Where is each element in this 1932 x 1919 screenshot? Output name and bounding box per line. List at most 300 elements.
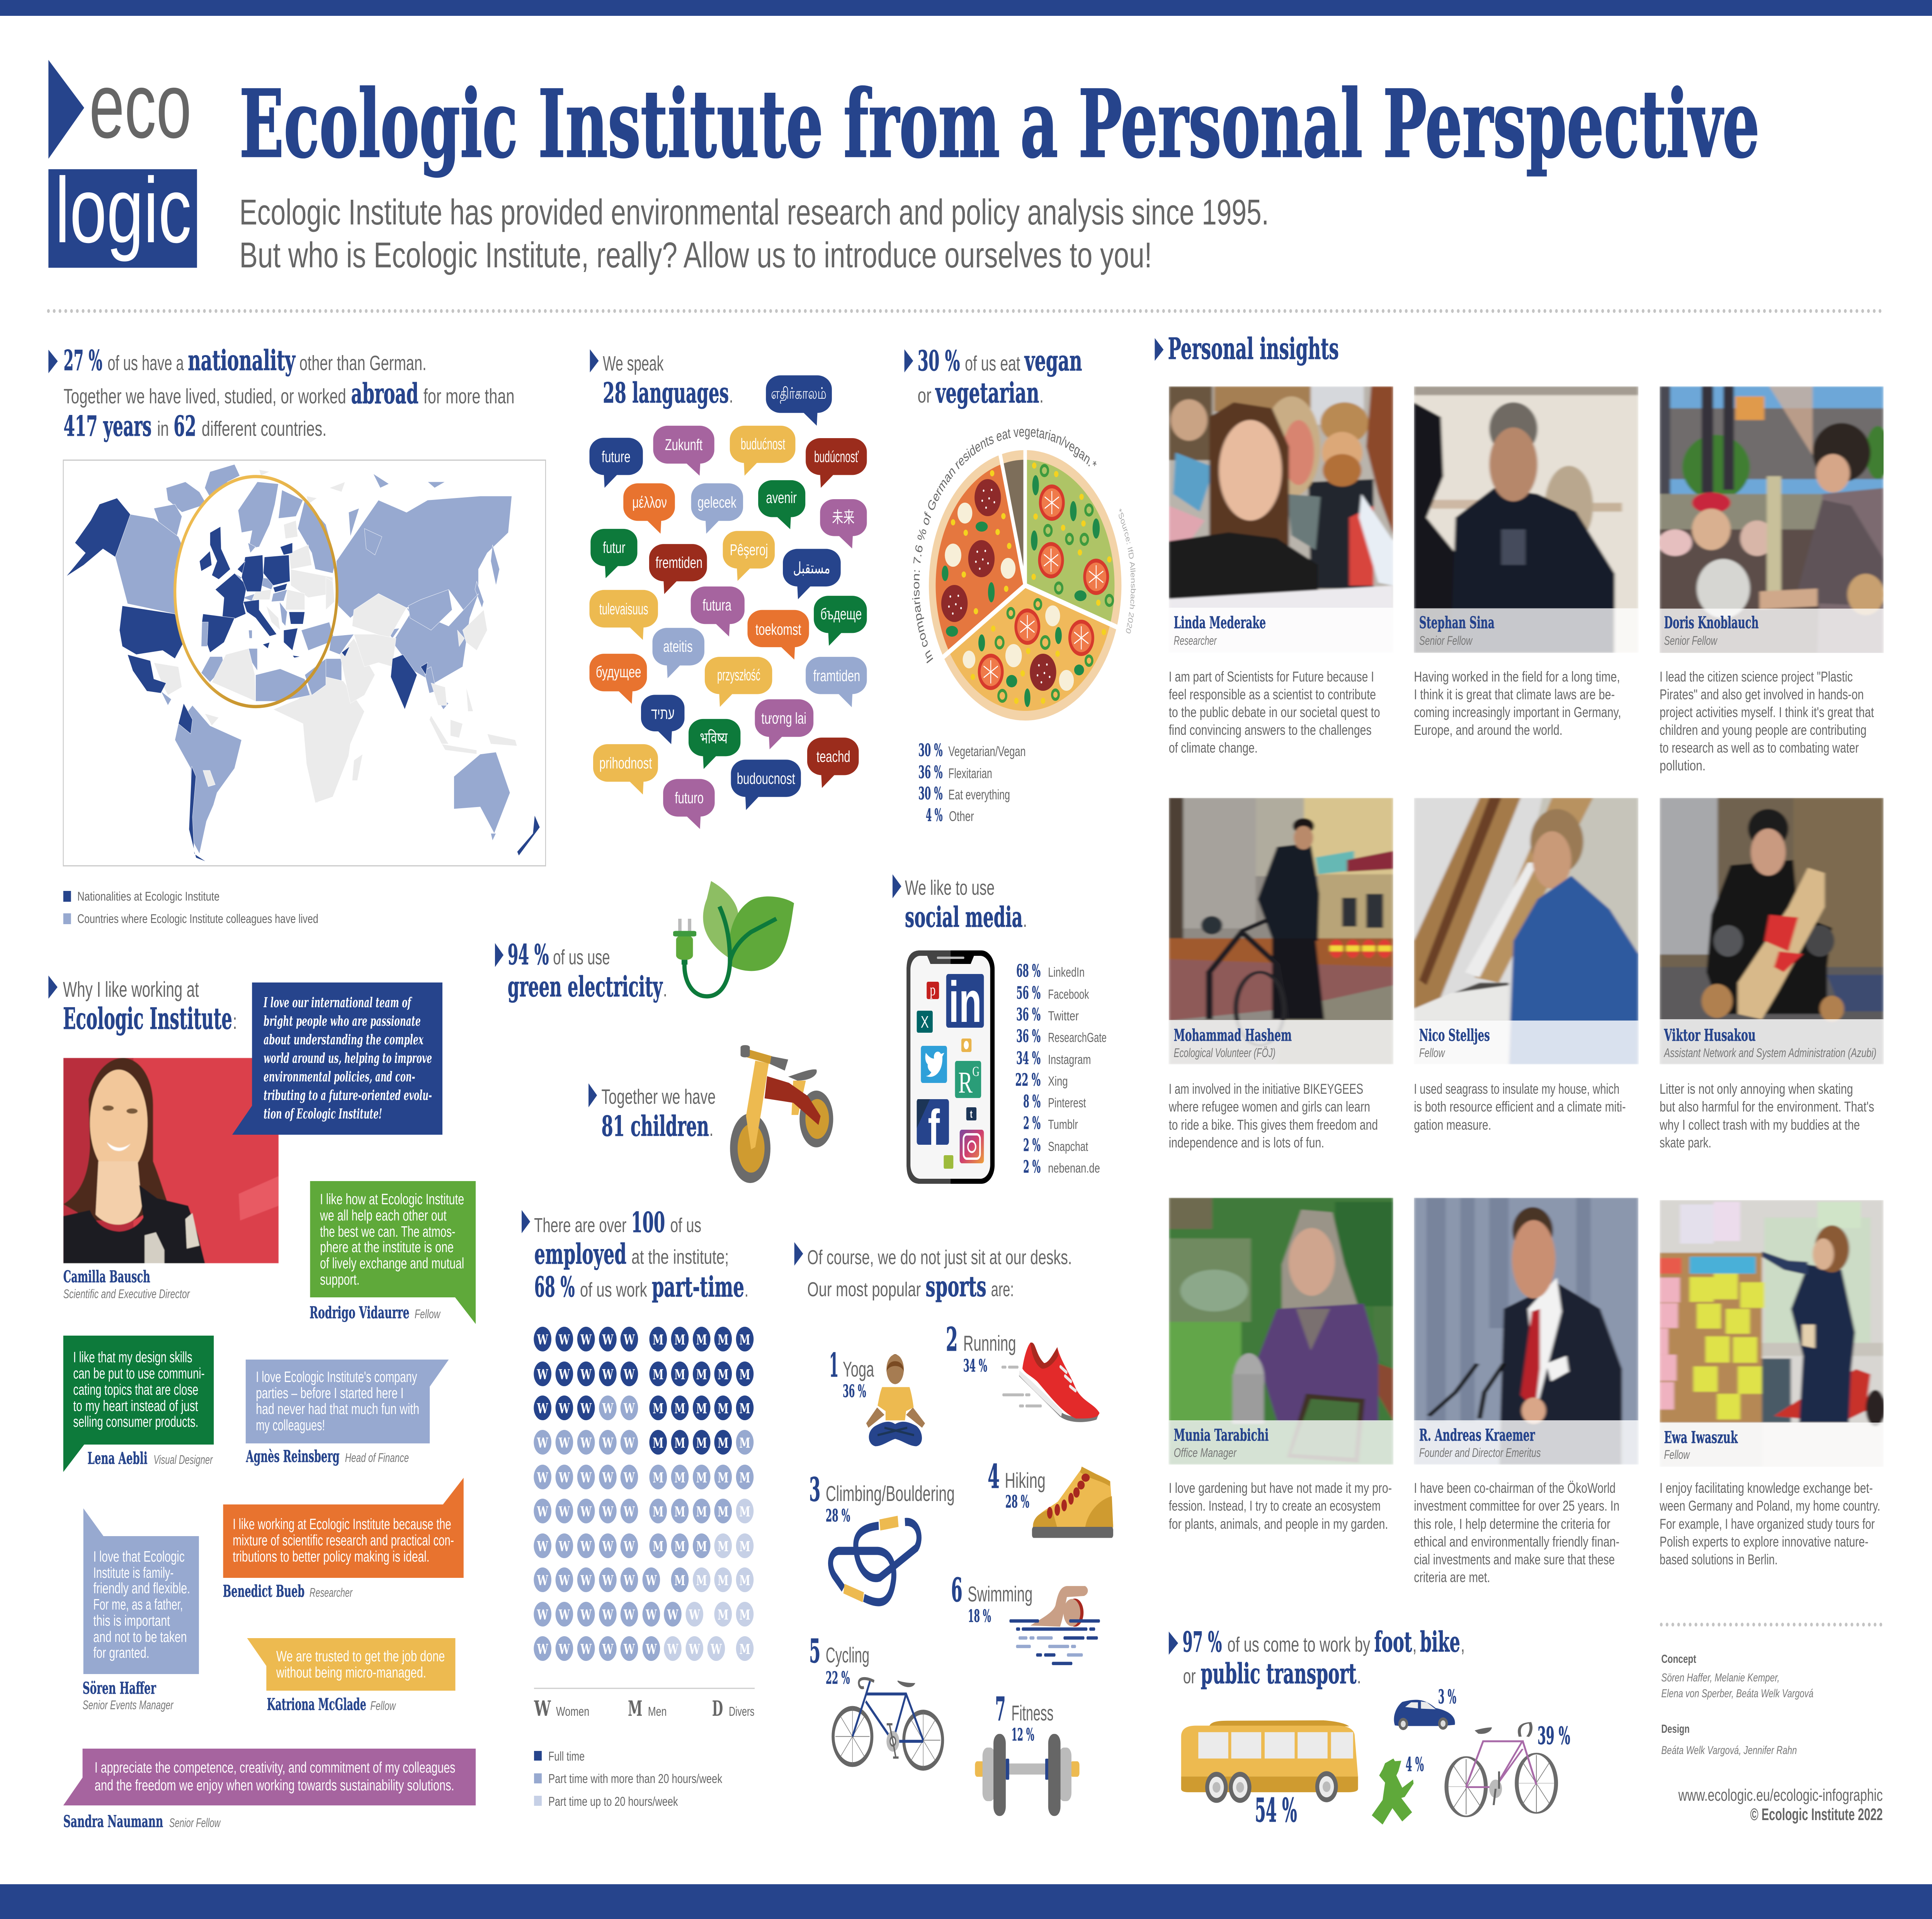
text: Ewa Iwaszuk: I enjoy facilitating knowledge exchange bet-	[1660, 1480, 1873, 1496]
quote: Rodrigo Vidaurre	[310, 1181, 476, 1324]
text: Ewa Iwaszuk: For example, I have organized study tours for	[1660, 1516, 1875, 1532]
icons: commute illustrations: 54 %	[1255, 1792, 1297, 1830]
text: Ewa Iwaszuk	[1659, 1480, 1880, 1567]
icon: smartphone with social apps: in	[949, 969, 982, 1034]
panel: commute heading: foot	[1374, 1625, 1412, 1658]
staff legend: M	[628, 1696, 643, 1721]
panel: commute heading: .	[1357, 1665, 1361, 1688]
caption: Doris Knoblauch: Doris Knoblauch	[1664, 613, 1759, 632]
photo: Linda Mederake	[1169, 386, 1393, 653]
caption: Ewa Iwaszuk	[1664, 1428, 1738, 1462]
social media list	[1015, 961, 1107, 1177]
panel: social media heading: We like to use	[905, 876, 995, 899]
photo: R. Andreas Kraemer	[1414, 1198, 1638, 1465]
photo: Nico Stelljes	[1414, 798, 1638, 1064]
social media list: LinkedIn	[1048, 965, 1085, 980]
panel: employment heading: 100	[631, 1206, 665, 1239]
chart: staff pictogram: WWWWWMMMMM	[537, 1401, 750, 1417]
quote: Sören Haffer: friendly and flexible.	[93, 1580, 190, 1597]
quote: Agnès Reinsberg: I love Ecologic Institute's company	[256, 1368, 417, 1385]
speech bubbles: future in 28 languages: עתיד	[651, 705, 675, 722]
icon: balance bike	[730, 1045, 833, 1183]
text: R. Andreas Kraemer: criteria are met.	[1414, 1569, 1490, 1585]
text: Nico Stelljes: I used seagrass to insulate my house, which	[1414, 1081, 1619, 1097]
credits: Beáta Welk Vargová, Jennifer Rahn	[1661, 1743, 1797, 1757]
chart: staff pictogram: WWWWWMMMMM	[537, 1367, 750, 1383]
quote: Benedict Bueb: tributions to better policy making is ideal.	[233, 1548, 430, 1565]
icon: car	[1394, 1700, 1455, 1730]
caption: R. Andreas Kraemer: R. Andreas Kraemer	[1419, 1426, 1535, 1445]
logo: eco	[89, 54, 192, 158]
quote: Rodrigo Vidaurre: the best we can. The atmos-	[320, 1223, 455, 1240]
logo	[48, 54, 197, 268]
title: Ecologic Institute from a Personal Perspective	[239, 70, 1760, 179]
panel: nationalities heading: abroad	[351, 377, 418, 410]
quote: Lena Aebli: to my heart instead of just	[73, 1397, 198, 1414]
icon: leaf with plug	[673, 881, 794, 996]
text: Doris Knoblauch: project activities myself. I think it's great that	[1660, 704, 1874, 720]
quote: Sören Haffer: and not to be taken	[93, 1628, 187, 1645]
text: Viktor Husakou: but also harmful for the environment. That's	[1660, 1099, 1874, 1115]
quote: Camilla Bausch: I love our international team of	[263, 995, 412, 1011]
quote: Lena Aebli: Lena Aebli	[87, 1449, 148, 1468]
quote: Sandra Naumann: Sandra Naumann	[63, 1812, 163, 1831]
panel: social media heading: .	[1023, 908, 1027, 931]
caption: Nico Stelljes: Nico Stelljes	[1419, 1026, 1490, 1045]
speech bubbles: future in 28 languages: tulevaisuus	[599, 600, 648, 618]
quote: Camilla Bausch: about understanding the complex	[264, 1032, 423, 1048]
text: Doris Knoblauch: pollution.	[1660, 758, 1706, 773]
text: Stephan Sina: I think it is great that climate laws are be-	[1414, 687, 1615, 702]
quote: Rodrigo Vidaurre: of lively exchange and mutual	[320, 1255, 464, 1272]
caption: Ewa Iwaszuk: Fellow	[1664, 1448, 1690, 1462]
social media list: 8 %	[1023, 1092, 1041, 1112]
photo: Mohammad Hashem	[1169, 798, 1393, 1064]
speech bubbles: future in 28 languages: prihodnost	[599, 754, 652, 772]
speech bubbles: future in 28 languages: مستقبل	[793, 559, 830, 577]
panel: children text: Together we have	[602, 1085, 716, 1108]
panel: languages heading: 28 languages	[603, 376, 729, 409]
quote: Camilla Bausch	[232, 982, 442, 1135]
speech bubbles: future in 28 languages: Pêşeroj	[730, 541, 768, 559]
text: Ewa Iwaszuk: Polish experts to explore innovative nature-	[1660, 1534, 1869, 1550]
name: Camilla Bausch	[63, 1267, 190, 1301]
name: Camilla Bausch: Camilla Bausch	[63, 1267, 150, 1286]
icon: running shoe	[1002, 1343, 1100, 1422]
chart: staff pictogram: WWWWWMMMMM	[537, 1539, 750, 1555]
pizza chart: In comparison: 7.6 % of German residents eat vegetarian/vegan.*	[910, 423, 1099, 666]
sport labels: 7	[995, 1691, 1006, 1729]
icons: commute illustrations: 39 %	[1537, 1721, 1570, 1750]
sport labels: 34 %	[963, 1356, 987, 1376]
chart: staff pictogram: WWWWWMMMMM	[537, 1435, 750, 1451]
quote: Katriona McGlade: without being micro-managed.	[276, 1664, 426, 1681]
quote: Sören Haffer: I love that Ecologic	[93, 1548, 185, 1565]
panel: social media heading	[893, 874, 1027, 933]
sport labels: Running	[963, 1331, 1016, 1356]
quote: Benedict Bueb: Benedict Bueb	[223, 1582, 304, 1601]
sport labels: 36 %	[843, 1382, 866, 1402]
panel: nationalities heading: for more than	[423, 385, 515, 408]
speech bubbles: future in 28 languages: futur	[603, 539, 626, 556]
social media list: 36 %	[1016, 1027, 1041, 1047]
sport labels: 22 %	[826, 1668, 850, 1688]
panel: employment heading: of us	[670, 1214, 701, 1237]
panel: green electricity text: of us use	[553, 946, 610, 969]
caption: Ewa Iwaszuk: Ewa Iwaszuk	[1664, 1428, 1738, 1447]
panel: nationalities heading: 27 %	[63, 344, 102, 377]
text: Nico Stelljes	[1414, 1081, 1626, 1133]
text: Nico Stelljes: gation measure.	[1414, 1117, 1491, 1133]
text: R. Andreas Kraemer: I have been co-chairman of the ÖkoWorld	[1414, 1480, 1616, 1496]
panel: employment heading: part-time	[652, 1270, 744, 1303]
social media list: 2 %	[1023, 1157, 1041, 1177]
caption: Stephan Sina: Senior Fellow	[1419, 634, 1473, 648]
sport labels: Climbing/Bouldering	[826, 1482, 955, 1506]
text: Ewa Iwaszuk: ween Germany and Poland, my home country.	[1659, 1498, 1880, 1514]
credits	[1661, 1652, 1813, 1757]
social media list: Pinterest	[1048, 1096, 1086, 1110]
speech bubbles: future in 28 languages: przyszłość	[717, 666, 760, 684]
text: R. Andreas Kraemer: this role, I help determine the criteria for	[1414, 1516, 1611, 1532]
quote: Agnès Reinsberg: Agnès Reinsberg	[246, 1447, 340, 1466]
panel: commute heading: ,	[1461, 1633, 1465, 1656]
speech bubbles: future in 28 languages: भविष्य	[700, 729, 728, 747]
social media list: 68 %	[1016, 961, 1041, 981]
text: Munia Tarabichi: for plants, animals, and people in my garden.	[1169, 1516, 1388, 1532]
pizza legend: Eat everything	[948, 787, 1010, 802]
text: R. Andreas Kraemer: cial investments and make sure that these	[1414, 1552, 1615, 1567]
quote: Lena Aebli: Visual Designer	[153, 1453, 213, 1467]
text: Doris Knoblauch	[1660, 669, 1874, 773]
text: Munia Tarabichi	[1169, 1480, 1392, 1532]
quote: Camilla Bausch: world around us, helping to improve	[264, 1050, 432, 1066]
staff legend: D	[712, 1696, 723, 1721]
staff legend: Men	[648, 1705, 667, 1719]
quote: Katriona McGlade	[247, 1638, 455, 1714]
text: Mohammad Hashem: where refugee women and girls can learn	[1168, 1099, 1370, 1115]
sport labels: 28 %	[1005, 1492, 1029, 1512]
sport labels: 2	[946, 1321, 958, 1359]
photo: Viktor Husakou	[1660, 798, 1884, 1064]
speech bubbles: future in 28 languages: ateitis	[663, 637, 693, 655]
staff legend: Women	[556, 1705, 589, 1719]
text: Viktor Husakou: skate park.	[1660, 1135, 1711, 1151]
quote: Rodrigo Vidaurre: phere at the institute is one	[320, 1239, 454, 1256]
pizza legend: Other	[949, 809, 974, 824]
sport labels: 28 %	[826, 1506, 850, 1526]
speech bubbles: future in 28 languages: framtiden	[813, 667, 860, 685]
caption: R. Andreas Kraemer	[1419, 1426, 1541, 1460]
speech bubbles: future in 28 languages: budoucnost	[737, 770, 795, 787]
panel: green electricity text: green electricity	[508, 970, 663, 1003]
social media list: 34 %	[1016, 1049, 1041, 1069]
website and copyright	[1678, 1786, 1883, 1824]
speech bubbles: future in 28 languages: gelecek	[697, 493, 736, 511]
chart: staff pictogram: WWWWWMMMMM	[537, 1504, 750, 1520]
quote: Sören Haffer: Sören Haffer	[83, 1679, 156, 1698]
caption: R. Andreas Kraemer: Founder and Director Emeritus	[1419, 1446, 1541, 1460]
text: Mohammad Hashem: I am involved in the initiative BIKEYGEES	[1169, 1081, 1363, 1097]
text: Stephan Sina: Having worked in the field for a long time,	[1414, 669, 1620, 685]
speech bubbles: future in 28 languages: teachd	[816, 748, 850, 765]
caption: Linda Mederake: Researcher	[1174, 634, 1217, 648]
speech bubbles: future in 28 languages: Zukunft	[665, 436, 702, 454]
speech bubbles: future in 28 languages: future	[602, 448, 631, 466]
social media list: Snapchat	[1048, 1139, 1088, 1154]
text: Munia Tarabichi: I love gardening but have not made it my pro-	[1169, 1480, 1392, 1496]
icon: smartphone with social apps: G	[972, 1064, 980, 1079]
name: Camilla Bausch: Scientific and Executive Director	[63, 1287, 190, 1301]
credits: Design	[1661, 1722, 1690, 1735]
icon: swimmer	[1009, 1586, 1100, 1665]
social media list: Twitter	[1048, 1009, 1079, 1023]
quote: Sören Haffer: Institute is family-	[93, 1564, 173, 1581]
text: Mohammad Hashem: independence and is lots of fun.	[1169, 1135, 1324, 1151]
quote: Katriona McGlade: We are trusted to get the job done	[276, 1648, 445, 1665]
chart: staff pictogram: WWWWWWWWWM	[537, 1642, 750, 1657]
caption: Munia Tarabichi: Munia Tarabichi	[1174, 1426, 1269, 1445]
speech bubbles: future in 28 languages: budućnost	[741, 435, 785, 453]
text: Linda Mederake: I am part of Scientists for Future because I	[1169, 669, 1374, 685]
sport labels: Swimming	[968, 1582, 1032, 1606]
panel: commute heading: ,	[1413, 1633, 1417, 1656]
caption: Linda Mederake	[1174, 613, 1266, 648]
arrow	[48, 350, 58, 373]
website and copyright: www.ecologic.eu/ecologic-infographic	[1678, 1786, 1883, 1805]
panel: social media heading: social media	[905, 901, 1023, 933]
panel: commute heading: bike	[1420, 1625, 1460, 1658]
panel: employment heading: .	[745, 1278, 748, 1301]
panel: nationalities heading: Together we have lived, studied, or worked	[63, 385, 346, 408]
staff legend: W	[534, 1696, 551, 1721]
panel: languages heading	[590, 349, 733, 409]
quote: Sandra Naumann: and the freedom we enjoy when working towards sustainability solutions.	[95, 1777, 454, 1794]
caption: Linda Mederake: Linda Mederake	[1174, 613, 1266, 632]
text: Linda Mederake	[1169, 669, 1380, 756]
speech bubbles: future in 28 languages: μέλλον	[632, 493, 667, 511]
staff legend: Divers	[729, 1705, 754, 1719]
quote: Sören Haffer: For me, as a father,	[93, 1596, 183, 1613]
speech bubbles: future in 28 languages: எதிர்காலம்	[771, 384, 827, 404]
text: R. Andreas Kraemer: investment committee for over 25 years. In	[1414, 1498, 1619, 1514]
text: Linda Mederake: feel responsible as a scientist to contribute	[1169, 687, 1376, 702]
quote: Sandra Naumann: Senior Fellow	[169, 1816, 221, 1830]
text: R. Andreas Kraemer: ethical and environmentally friendly finan-	[1414, 1534, 1619, 1550]
icon: dumbbell	[975, 1734, 1080, 1816]
quote: Sören Haffer: Senior Events Manager	[83, 1698, 174, 1712]
subtitle: But who is Ecologic Institute, really? Allow us to introduce ourselves to you!	[239, 235, 1152, 275]
subtitle	[239, 192, 1269, 275]
panel: nationalities heading: of us have a	[107, 352, 184, 375]
sport labels: 12 %	[1011, 1725, 1034, 1745]
text: Doris Knoblauch: to research as well as to combating water	[1660, 740, 1859, 756]
map legend	[63, 889, 318, 926]
caption: Stephan Sina: Stephan Sina	[1419, 613, 1495, 632]
text: Linda Mederake: to the public debate in our societal quest to	[1169, 704, 1380, 720]
website and copyright: © Ecologic Institute 2022	[1750, 1805, 1883, 1824]
social media list: Instagram	[1048, 1052, 1091, 1067]
icons: commute illustrations: 3 %	[1438, 1686, 1456, 1708]
photo: Ewa Iwaszuk	[1660, 1200, 1885, 1467]
panel: nationalities heading: 62	[173, 410, 196, 442]
sport labels: 1	[829, 1347, 838, 1385]
quote: Camilla Bausch: environmental policies, and con-	[264, 1069, 415, 1085]
icon: walking Ampelmann	[1372, 1759, 1413, 1824]
sport labels: 3	[809, 1471, 820, 1509]
panel: nationalities heading: different countries.	[202, 417, 327, 440]
panel: vegan heading	[905, 344, 1082, 409]
text: Viktor Husakou: why I collect trash with my buddies at the	[1659, 1117, 1860, 1133]
pizza legend: 30 %	[918, 741, 942, 761]
panel: why I like working heading: Ecologic Institute	[63, 1001, 232, 1036]
panel: vegan heading: vegetarian	[935, 376, 1039, 409]
quote: Lena Aebli: I like that my design skills	[73, 1349, 192, 1366]
quote: Benedict Bueb: I like working at Ecologic Institute because the	[233, 1516, 451, 1533]
icon: purple bicycle	[1446, 1723, 1556, 1816]
pizza legend: 36 %	[918, 763, 942, 783]
social media list: 2 %	[1023, 1113, 1041, 1134]
sport labels	[809, 1321, 1053, 1745]
panel: commute heading: 97 %	[1182, 1625, 1222, 1658]
panel: commute heading: or	[1183, 1665, 1196, 1688]
quote: Lena Aebli: selling consumer products.	[73, 1413, 198, 1430]
panel: green electricity text	[495, 938, 667, 1003]
chart: staff pictogram: WWWWWMMMMM	[537, 1470, 750, 1486]
speech bubbles: future in 28 languages: budúcnosť	[814, 448, 859, 466]
staff legend: Part time up to 20 hours/week	[548, 1795, 678, 1809]
caption: Viktor Husakou	[1663, 1026, 1876, 1060]
chart: staff pictogram: WWWWWMMMMM	[537, 1332, 750, 1348]
social media list: nebenan.de	[1048, 1161, 1100, 1176]
quote: Benedict Bueb: mixture of scientific research and practical con-	[233, 1532, 454, 1549]
icon: bicycle	[833, 1679, 942, 1768]
staff legend	[534, 1688, 755, 1809]
pizza legend: 4 %	[926, 806, 942, 826]
panel: vegan heading: .	[1039, 384, 1044, 407]
sport labels: 6	[951, 1572, 963, 1610]
social media list: Facebook	[1048, 987, 1089, 1002]
speech bubbles: future in 28 languages: 未来	[832, 508, 855, 526]
icon: carabiners	[831, 1516, 919, 1602]
panel: nationalities heading: other than German.	[299, 352, 427, 375]
pizza legend: Flexitarian	[948, 766, 992, 781]
social media list: Tumblr	[1048, 1117, 1078, 1132]
quote: Sandra Naumann	[63, 1749, 476, 1831]
map legend: Nationalities at Ecologic Institute	[77, 889, 219, 903]
caption: Viktor Husakou: Viktor Husakou	[1664, 1026, 1756, 1045]
quote: Benedict Bueb	[223, 1478, 464, 1601]
text: Doris Knoblauch: Pirates" and also get involved in hands-on	[1660, 687, 1864, 702]
caption: Stephan Sina	[1419, 613, 1495, 648]
quote: Camilla Bausch: tion of Ecologic Institute!	[264, 1106, 382, 1122]
sport labels: Cycling	[826, 1643, 869, 1667]
panel: languages heading: .	[729, 384, 733, 407]
quote: Agnès Reinsberg: parties – before I started here I	[256, 1385, 404, 1402]
social media list: 2 %	[1023, 1135, 1041, 1156]
sport labels: Hiking	[1005, 1469, 1046, 1493]
icons: sports illustrations	[831, 1343, 1113, 1816]
panel: sports heading: Our most popular	[807, 1278, 921, 1301]
pizza chart: *Source: IfD Allensbach 2020	[1116, 507, 1137, 635]
icon: smartphone with social apps	[906, 950, 995, 1184]
speech bubbles: future in 28 languages: futura	[702, 596, 731, 614]
sport labels: 5	[809, 1633, 820, 1671]
text: Linda Mederake: find convincing answers to the challenges	[1169, 722, 1372, 738]
speech bubbles: future in 28 languages: будущее	[596, 663, 641, 681]
text: Linda Mederake: of climate change.	[1169, 740, 1258, 756]
staff legend: Full time	[548, 1749, 585, 1764]
quote: Rodrigo Vidaurre: I like how at Ecologic Institute	[320, 1191, 464, 1208]
quote: Rodrigo Vidaurre: we all help each other out	[320, 1207, 447, 1224]
quote: Rodrigo Vidaurre: support.	[320, 1271, 360, 1288]
social media list: 56 %	[1016, 983, 1041, 1003]
quote: Agnès Reinsberg: my colleagues!	[256, 1417, 325, 1434]
icon: yoga	[866, 1354, 925, 1446]
panel: children text	[588, 1083, 716, 1142]
sport labels: 18 %	[968, 1606, 991, 1627]
pizza legend	[918, 741, 1026, 826]
sport labels: Yoga	[843, 1357, 874, 1382]
quote: Camilla Bausch: bright people who are passionate	[264, 1013, 421, 1029]
quote: Rodrigo Vidaurre: Rodrigo Vidaurre	[310, 1303, 410, 1322]
icon: smartphone with social apps: X	[921, 1013, 929, 1032]
chart: staff pictogram	[534, 1327, 753, 1661]
quote: Katriona McGlade: Katriona McGlade	[267, 1695, 366, 1714]
panel: sports heading: are:	[991, 1278, 1014, 1301]
social media list: 22 %	[1015, 1070, 1041, 1090]
panel: employment heading: of us work	[580, 1278, 647, 1301]
chart: staff pictogram: WWWWWWMMMM	[537, 1573, 750, 1589]
panel: employment heading: There are over	[534, 1214, 626, 1237]
credits: Concept	[1661, 1652, 1696, 1666]
sport labels: Fitness	[1011, 1701, 1053, 1725]
credits: Sören Haffer, Melanie Kemper,	[1661, 1671, 1780, 1684]
quote: Sören Haffer: for granted.	[93, 1644, 150, 1661]
staff legend: Part time with more than 20 hours/week	[548, 1772, 723, 1786]
quote: Sören Haffer	[83, 1508, 199, 1712]
social media list: ResearchGate	[1048, 1030, 1107, 1045]
caption: Nico Stelljes	[1419, 1026, 1490, 1060]
panel: sports heading	[794, 1242, 1072, 1303]
panel: nationalities heading: nationality	[188, 344, 296, 377]
panel: why I like working heading: Why I like working at	[63, 977, 199, 1002]
quote: Benedict Bueb: Researcher	[310, 1586, 353, 1599]
top bar	[0, 0, 1932, 16]
map legend: Countries where Ecologic Institute colleagues have lived	[77, 912, 318, 926]
icon: bus	[1181, 1720, 1358, 1803]
speech bubbles: future in 28 languages	[589, 375, 867, 829]
quote: Lena Aebli: cating topics that are close	[73, 1381, 198, 1398]
text: Stephan Sina: Europe, and around the world.	[1414, 722, 1563, 738]
pizza legend: Vegetarian/Vegan	[948, 744, 1026, 759]
quote: Lena Aebli: can be put to use communi-	[73, 1365, 205, 1382]
caption: Mohammad Hashem: Ecological Volunteer (FÖJ)	[1174, 1046, 1276, 1060]
quote: Agnès Reinsberg: Head of Finance	[345, 1451, 409, 1465]
pizza legend: 30 %	[918, 784, 942, 804]
panel: nationalities heading: in	[157, 417, 169, 440]
panel: nationalities heading: 417 years	[63, 410, 151, 442]
panel: commute heading: of us come to work by	[1227, 1633, 1370, 1656]
text: Munia Tarabichi: fession. Instead, I try to create an ecosystem	[1169, 1498, 1381, 1514]
text: Ewa Iwaszuk: based solutions in Berlin.	[1660, 1552, 1778, 1567]
panel: children text: .	[709, 1117, 713, 1141]
quote: Agnès Reinsberg	[246, 1360, 449, 1466]
panel: nationalities heading	[48, 344, 515, 442]
caption: Nico Stelljes: Fellow	[1419, 1046, 1446, 1060]
caption: Munia Tarabichi	[1174, 1426, 1269, 1460]
caption: Doris Knoblauch: Senior Fellow	[1664, 634, 1718, 648]
